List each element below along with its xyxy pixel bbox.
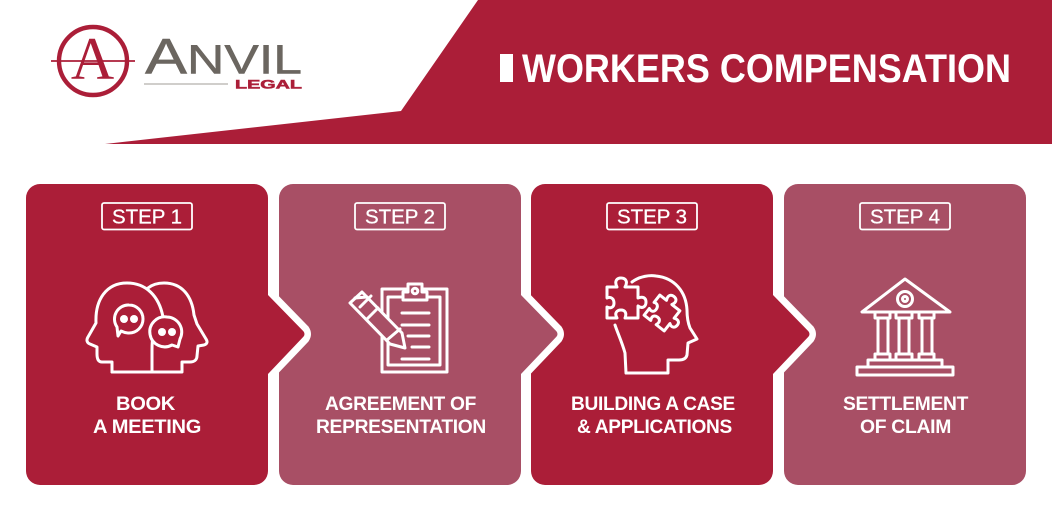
arrow outline: [521, 285, 564, 384]
panel: step 4: [784, 184, 1026, 485]
icon: clipboard and pencil: [350, 284, 447, 372]
step 4 badge: STEP 4: [870, 206, 940, 228]
step 3 badge: [607, 203, 697, 230]
icon: courthouse: [857, 279, 953, 375]
step 3 label: BUILDING A CASE: [571, 394, 735, 415]
step 4 label: SETTLEMENT: [843, 394, 969, 415]
title: WORKERS COMPENSATION: [522, 47, 1011, 91]
icon: head with puzzle pieces: [607, 276, 697, 373]
step 3 badge: STEP 3: [617, 206, 687, 228]
step 3 card with arrow: [531, 184, 810, 485]
icon: two heads with speech bubbles: [87, 283, 207, 372]
arrow outline: [268, 285, 311, 384]
panel: step 1: [26, 184, 311, 485]
step 2 label: AGREEMENT OF: [325, 394, 476, 415]
step 1 label: BOOK: [116, 394, 176, 415]
icon dots: [120, 315, 176, 336]
logo: [51, 26, 302, 95]
step 3 label: & APPLICATIONS: [577, 417, 732, 438]
step 1 label: A MEETING: [93, 417, 201, 438]
step 4 label: OF CLAIM: [860, 417, 951, 438]
step 1 badge: [102, 203, 192, 230]
arrow outline: [773, 285, 816, 384]
logo underline: [144, 83, 228, 85]
panel: step 3: [531, 184, 816, 485]
step 1 card with arrow: [26, 184, 304, 485]
step 2 card with arrow: [279, 184, 558, 485]
step 1 badge: STEP 1: [112, 206, 182, 228]
step 4 badge: [860, 203, 950, 230]
logo emblem: A: [71, 26, 114, 92]
logo subtitle: LEGAL: [235, 78, 302, 92]
panel: step 2: [279, 184, 564, 485]
step 2 label: REPRESENTATION: [316, 417, 486, 438]
logo emblem: [51, 26, 135, 95]
step 2 badge: STEP 2: [365, 206, 435, 228]
step 2 badge: [355, 203, 445, 230]
logo wordmark: ANVIL: [145, 28, 302, 84]
header banner: [105, 0, 1052, 144]
